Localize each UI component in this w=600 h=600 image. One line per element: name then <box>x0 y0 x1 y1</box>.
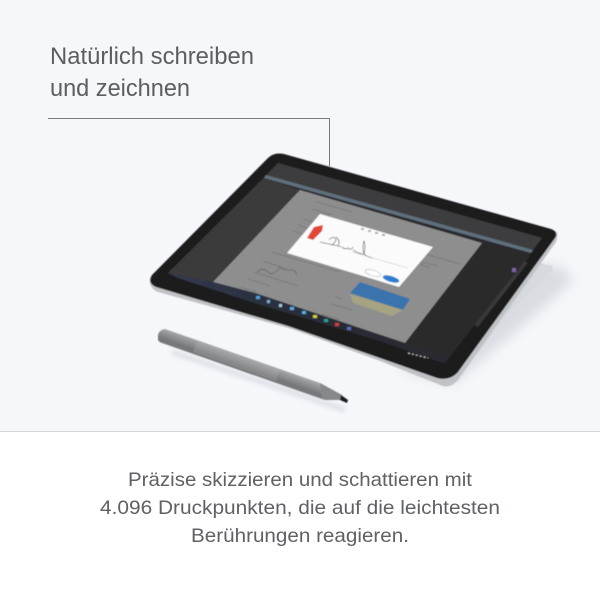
pen shadow <box>172 352 345 410</box>
tablet screen <box>168 163 542 363</box>
pen band <box>193 341 280 381</box>
document page <box>213 190 482 343</box>
signature field <box>257 267 297 275</box>
left side panel <box>168 178 300 282</box>
bottom panel <box>0 431 600 600</box>
handwritten signature <box>320 237 373 258</box>
pen body <box>158 329 342 400</box>
yellow note <box>350 294 403 316</box>
heading <box>50 43 254 102</box>
callout line <box>48 118 330 166</box>
tablet bezel <box>150 154 556 379</box>
cancel button <box>365 268 381 278</box>
tablet <box>150 154 557 386</box>
description text: Berührungen reagieren. <box>191 525 409 547</box>
pen tip <box>340 395 348 403</box>
kickstand <box>503 263 553 314</box>
app toolbar <box>266 163 542 250</box>
dialog icons <box>361 228 385 236</box>
description text <box>100 469 500 547</box>
system tray <box>408 353 428 358</box>
signature baseline <box>352 252 408 268</box>
tablet shadow <box>400 262 572 383</box>
document text <box>241 202 460 320</box>
tablet silver edge <box>150 232 557 386</box>
right toolbar <box>476 262 526 326</box>
heading: Natürlich schreiben <box>50 43 254 70</box>
blue tooltip <box>350 282 410 310</box>
confirm button <box>382 274 400 284</box>
right side panel <box>405 243 530 358</box>
heading: und zeichnen <box>50 75 190 102</box>
taskbar icons <box>256 296 351 330</box>
taskbar <box>168 273 447 363</box>
signature dialog <box>287 214 433 287</box>
stylus pen <box>158 329 348 403</box>
description text: Präzise skizzieren und schattieren mit <box>128 469 473 491</box>
description text: 4.096 Druckpunkten, die auf die leichtesten <box>100 497 500 519</box>
red tag <box>307 225 323 240</box>
pen cone <box>320 383 342 400</box>
